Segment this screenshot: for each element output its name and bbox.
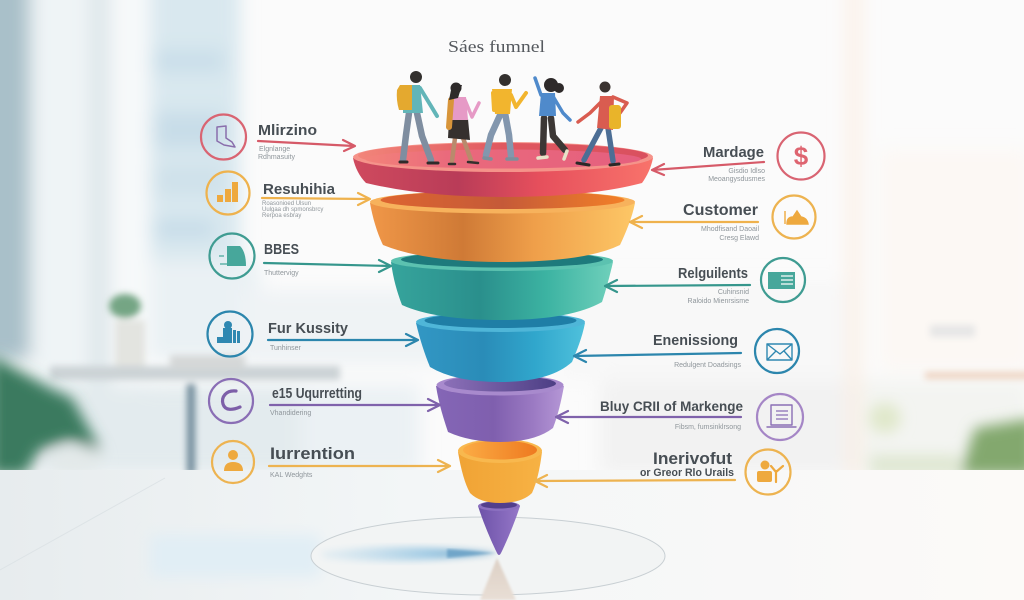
person 4: [535, 78, 570, 159]
left item: Mlirzino: [201, 114, 355, 161]
person 2: [448, 82, 479, 164]
tier: orange: [370, 190, 635, 262]
right item: Mardage: [652, 132, 824, 183]
caption: Uulgaa dh spmonsbrcy: [262, 207, 323, 213]
icon: person badge: [212, 441, 254, 483]
caption: KAL Wedghts: [270, 472, 313, 479]
arrow: [268, 334, 418, 346]
icon: people chart badge: [208, 312, 252, 356]
tier: teal: [391, 251, 613, 320]
heading: Iurrention: [270, 444, 355, 463]
left item: Fur Kussity: [208, 312, 418, 356]
icon: shoe badge: [772, 196, 816, 238]
caption: Cresg Elawd: [719, 235, 759, 242]
icon: building badge: [201, 114, 246, 160]
person 3: [484, 74, 526, 159]
heading: Resuhihia: [263, 181, 336, 198]
right item: Enenissiong: [574, 329, 799, 373]
heading: Enenissiong: [653, 332, 738, 349]
arrow: [269, 460, 450, 472]
caption: Thuttervigy: [264, 270, 299, 277]
heading: Fur Kussity: [268, 320, 349, 337]
icon: person and plant badge: [746, 450, 790, 494]
icon: envelope badge: [755, 329, 799, 373]
heading: Relguilents: [678, 265, 748, 282]
title: Sáes fumnel: [448, 37, 545, 56]
caption: Roasonioed Ulsun: [262, 201, 311, 207]
caption: Redulgent Doadsings: [674, 362, 741, 369]
table surface: [0, 470, 1024, 600]
left item: Iurrention: [212, 441, 450, 483]
right item: Relguilents: [605, 258, 805, 305]
arrow: [574, 350, 741, 362]
right item: Inerivofut: [535, 449, 790, 494]
left item: e15 Uqurretting: [209, 379, 440, 423]
arrow: [556, 411, 741, 423]
subheading: or Greor Rlo Urails: [640, 467, 734, 479]
person 5: [577, 82, 627, 165]
floor disc with shadow and reflection: [311, 517, 665, 600]
tier: cone tip: [478, 501, 520, 555]
tier: purple: [436, 374, 564, 442]
heading: e15 Uqurretting: [272, 385, 362, 402]
heading: Customer: [683, 202, 758, 219]
heading: Mlirzino: [258, 122, 317, 139]
person 1: [397, 71, 438, 163]
caption: Raloido Mienrsisme: [688, 298, 749, 305]
left item: BBES: [210, 234, 391, 278]
tier: red top platform: [353, 142, 653, 197]
icon: dollar badge: $: [794, 141, 809, 171]
left item: Resuhihia: [206, 172, 370, 219]
caption: Rdhmasuity: [258, 154, 295, 161]
heading: Mardage: [703, 144, 764, 161]
right item: Customer: [630, 196, 816, 242]
caption: Mhodfisand Daoail: [701, 226, 759, 233]
arrow: [630, 216, 758, 228]
icon: document badge: [210, 234, 254, 278]
icon: bars badge: [206, 172, 250, 214]
heading: Inerivofut: [653, 449, 732, 468]
caption: Gisdio Idlso: [728, 168, 765, 175]
caption: Rerpoa esbray: [262, 213, 301, 219]
caption: Cuhinsnid: [718, 289, 749, 296]
heading: Bluy CRII of Markenge: [600, 399, 743, 414]
right item: Bluy CRII of Markenge: [556, 394, 803, 440]
icon: book badge: [757, 394, 803, 440]
arrow: [270, 399, 440, 411]
caption: Elgnlange: [259, 146, 290, 153]
tier: yellow cup: [458, 439, 542, 503]
funnel: [353, 142, 653, 555]
arrow: [605, 280, 750, 292]
caption: Vhandidering: [270, 410, 311, 417]
arrow: [652, 162, 764, 175]
icon: list card badge: [761, 258, 805, 302]
caption: Fibsm, fumsinklrsong: [675, 424, 741, 431]
icon: swirl badge: [209, 379, 253, 423]
caption: Meoangysdusmes: [708, 176, 765, 183]
arrow: [264, 260, 391, 272]
icon: dollar badge: [778, 132, 824, 180]
people on the funnel: [397, 71, 627, 165]
arrow: [535, 475, 735, 487]
arrow: [258, 140, 355, 151]
heading: BBES: [264, 241, 299, 258]
tier: blue: [416, 312, 585, 382]
caption: Tunhinser: [270, 345, 302, 352]
arrow: [262, 193, 370, 205]
